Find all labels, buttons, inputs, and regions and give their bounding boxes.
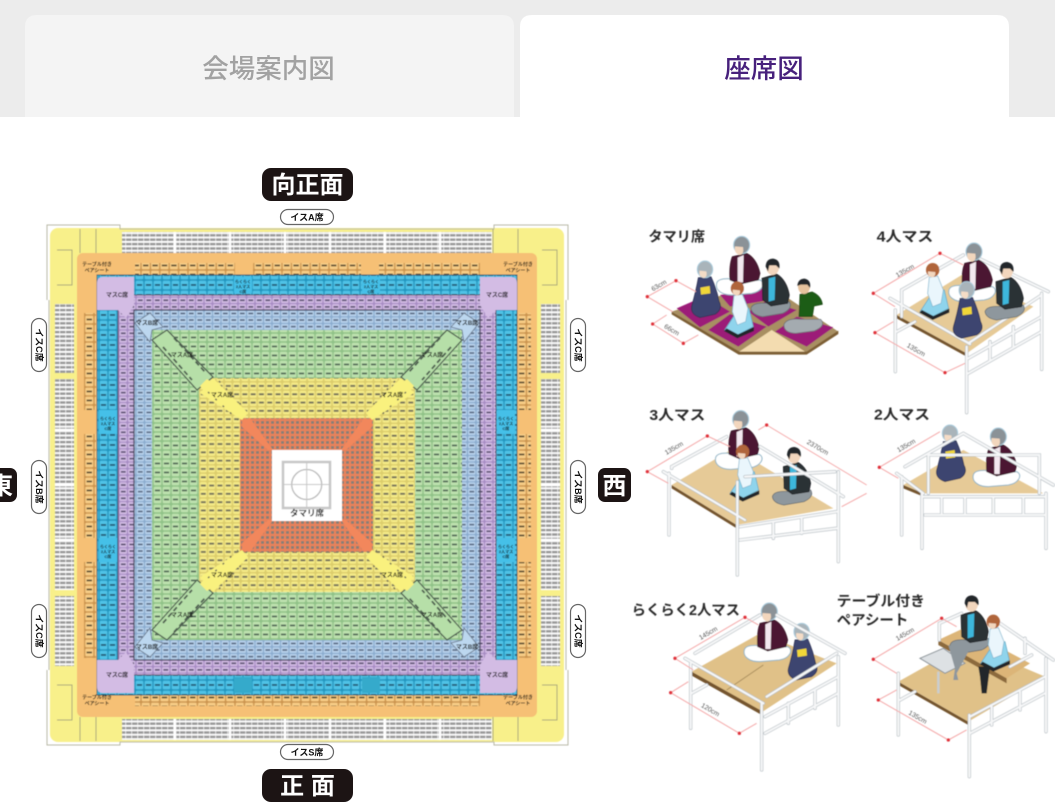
pill: イスS席: [280, 744, 334, 760]
plan labels: seat zones: マスC席: [106, 671, 128, 679]
plan labels: seat zones: マスC席: [106, 291, 128, 299]
pill: イスC席 right lower: [570, 604, 586, 658]
pill: イスA席: イスA席: [290, 212, 324, 222]
plan labels: seat zones: C席: [105, 553, 111, 559]
panel: テーブル付きペアシート: ペアシート: [837, 613, 908, 629]
zone: light blue マス: [134, 310, 480, 660]
plan labels: seat zones: らくらく: [100, 543, 116, 549]
direction label: 向正面: [262, 168, 353, 201]
panel: らくらく2人マス: 145cm: [698, 625, 719, 642]
zone: blue マスC: [97, 275, 517, 695]
plan labels: seat zones: マスB席: [136, 319, 158, 327]
panel: テーブル付きペアシート: テーブル付き: [837, 592, 925, 610]
direction label: 西: [598, 468, 631, 502]
panel: 3人マス: 135cm: [664, 440, 685, 457]
pill: イスC席 left upper: イスC席: [34, 328, 45, 362]
panel: 3人マス: 2370cm: [805, 439, 830, 457]
panel: テーブル付きペアシート: [837, 592, 1053, 777]
plan labels: seat zones: マスA席: [211, 391, 233, 399]
plan labels: seat zones: テーブル付き: [82, 694, 112, 701]
plan labels: seat zones: らくらく: [363, 278, 379, 284]
zone: yellow マスA: [199, 378, 415, 592]
pill: イスC席 left upper: [32, 318, 46, 372]
centre ring: dohyo: タマリ席: [290, 508, 324, 518]
plan labels: seat zones: マスA席: [421, 611, 443, 619]
direction label: 正面: 正 面: [280, 773, 335, 800]
zone: green マスA: [152, 330, 462, 640]
plan labels: seat zones: C席: [503, 553, 509, 559]
plan labels: seat zones: マスC席: [486, 671, 508, 679]
plan labels: seat zones: 2人マス: [364, 284, 378, 289]
panel: 4人マス: 135cm: [905, 342, 927, 359]
pill: イスC席 left lower: イスC席: [34, 614, 45, 648]
corner stair details: [57, 229, 557, 741]
plan labels: seat zones: らくらく: [100, 415, 116, 421]
plan labels: seat zones: 2人マス: [101, 549, 115, 554]
pill: イスC席 right upper: イスC席: [573, 328, 584, 362]
pill: イスC席 right upper: [570, 318, 586, 372]
plan labels: seat zones: マスB席: [136, 643, 158, 651]
panel: 2人マス: [874, 407, 1053, 548]
plan labels: seat zones: [82, 261, 533, 707]
pill: イスC席 left lower: [32, 604, 46, 658]
centre ring: dohyo: [272, 450, 342, 521]
plan labels: seat zones: マスA席: [421, 351, 443, 359]
tab: 座席図 (active): 座席図: [724, 54, 804, 84]
pill: イスB席 left middle: [32, 460, 46, 514]
pill: イスB席 right middle: イスB席: [573, 470, 584, 504]
pill: イスA席: [280, 210, 334, 224]
panel: タマリ席: タマリ席: [648, 228, 705, 246]
plan labels: seat zones: テーブル付き: [503, 261, 533, 268]
tab: 会場案内図: 会場案内図: [202, 54, 335, 84]
direction label: 向正面: 向正面: [272, 172, 344, 199]
purple corner blocks: [97, 277, 517, 693]
direction label: 東: [0, 468, 17, 502]
plan labels: seat zones: マスA席: [381, 391, 403, 399]
panel: 3人マス: 3人マス: [649, 408, 705, 424]
panel: 4人マス: 135cm: [895, 263, 916, 279]
panel: タマリ席: 66cm: [663, 323, 681, 338]
plan labels: seat zones: C席: [503, 425, 509, 431]
plan labels: seat zones: マスA席: [381, 571, 403, 579]
plan labels: seat zones: らくらく: [235, 278, 251, 284]
plan labels: seat zones: C席: [368, 288, 374, 294]
plan labels: seat zones: らくらく: [498, 415, 514, 421]
direction label: 西: 西: [602, 473, 626, 500]
plan labels: seat zones: 2人マス: [101, 421, 115, 426]
plan labels: seat zones: ペアシート: [85, 268, 109, 274]
plan labels: seat zones: ペアシート: [506, 701, 530, 707]
panel: らくらく2人マス: らくらく2人マス: [632, 602, 740, 619]
outer yellow concourse: [50, 228, 564, 742]
pill: イスS席: イスS席: [291, 746, 323, 758]
panel: 2人マス: 2人マス: [874, 407, 930, 423]
plan labels: seat zones: ペアシート: [85, 701, 109, 707]
plan labels: seat zones: C席: [240, 288, 246, 294]
plan labels: seat zones: 2人マス: [499, 549, 513, 554]
seating plan: [47, 225, 568, 745]
panel: らくらく2人マス: 120cm: [700, 702, 721, 719]
panel: タマリ席: [646, 228, 838, 355]
plan labels: seat zones: マスA席: [171, 611, 193, 619]
plan labels: seat zones: マスB席: [456, 319, 478, 327]
panel: 4人マス: [872, 230, 1048, 413]
tab: 会場案内図: [25, 15, 514, 117]
pill: イスB席 right middle: [570, 460, 586, 514]
plan labels: seat zones: マスA席: [211, 571, 233, 579]
seat type illustrations: [632, 228, 1053, 777]
panel: 4人マス: 4人マス: [877, 230, 933, 246]
plan labels: seat zones: マスB席: [456, 643, 478, 651]
pill: イスC席 right lower: イスC席: [573, 614, 584, 648]
pill: イスB席 left middle: イスB席: [34, 470, 45, 504]
outer building outline: [47, 225, 568, 745]
plan labels: seat zones: らくらく: [498, 543, 514, 549]
plan labels: seat zones: 2人マス: [499, 421, 513, 426]
plan labels: seat zones: テーブル付き: [503, 694, 533, 701]
outer chair seats (イス席): [55, 232, 560, 740]
plan labels: seat zones: マスA席: [171, 351, 193, 359]
diagonal aisles: [135, 313, 479, 657]
zone: red タマリ席: [240, 418, 373, 552]
zone: purple マス: [118, 295, 496, 675]
zone: orange テーブル席 / マス: [77, 253, 537, 717]
panel: タマリ席: 63cm: [650, 279, 668, 293]
tab bar background: [0, 0, 1055, 117]
direction label: 正面: [262, 769, 353, 802]
tab: 座席図 (active): [520, 15, 1009, 117]
plan labels: seat zones: テーブル付き: [82, 261, 112, 268]
panel: らくらく2人マス: [632, 602, 845, 770]
panel: テーブル付きペアシート: 135cm: [907, 710, 928, 726]
plan labels: seat zones: 2人マス: [236, 284, 250, 289]
plan labels: seat zones: C席: [105, 425, 111, 431]
plan labels: seat zones: マスC席: [486, 291, 508, 299]
plan labels: seat zones: ペアシート: [506, 268, 530, 274]
panel: テーブル付きペアシート: 145cm: [895, 626, 916, 643]
panel: 2人マス: 135cm: [896, 438, 917, 454]
panel: 3人マス: [646, 408, 867, 575]
